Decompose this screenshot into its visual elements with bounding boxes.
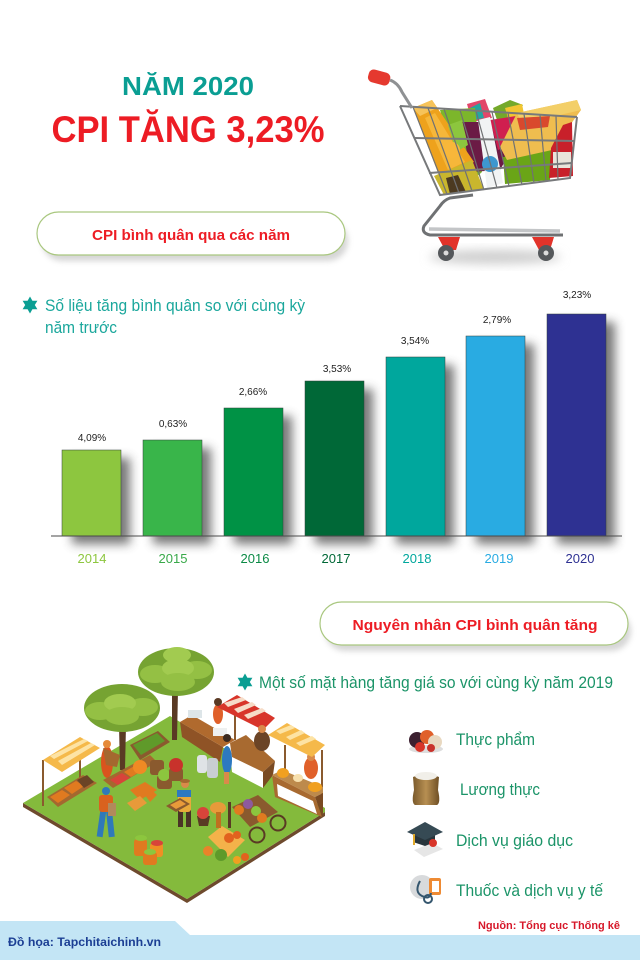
year labels: 2018 <box>403 551 431 566</box>
trees <box>84 647 214 770</box>
right stall <box>268 723 325 817</box>
heading: causes <box>320 602 631 651</box>
ground <box>23 803 325 903</box>
icon: graduation cap <box>407 822 443 857</box>
orange stand <box>203 802 249 864</box>
customer with bag <box>97 787 116 837</box>
year labels: 2019 <box>485 551 513 566</box>
item: medicine and health: Thuốc và dịch vụ y tế <box>456 881 603 900</box>
illustration: market <box>23 647 325 903</box>
chart note: năm trước <box>45 318 117 337</box>
title: CPI TĂNG 3,23% <box>52 109 324 150</box>
year labels <box>78 551 594 566</box>
year labels: 2014 <box>78 551 106 566</box>
icon: stethoscope <box>410 875 441 903</box>
baskets and sacks <box>134 807 210 865</box>
icon: food <box>409 730 443 753</box>
produce cart <box>228 795 286 842</box>
year labels: 2020 <box>566 551 594 566</box>
year labels: 2015 <box>159 551 187 566</box>
heading: causes: Nguyên nhân CPI bình quân tăng <box>352 617 598 634</box>
farmer <box>166 779 191 827</box>
list: price-rising items <box>407 730 603 903</box>
chart note <box>45 296 305 337</box>
value labels: 3,23% <box>563 290 591 301</box>
value labels: 3,53% <box>323 364 351 375</box>
footer band <box>0 921 640 960</box>
value labels: 2,66% <box>239 387 267 398</box>
value labels <box>78 290 591 444</box>
source: Nguồn: Tổng cục Thống kê <box>478 920 620 932</box>
vendor and crates <box>101 731 183 811</box>
value labels: 3,54% <box>401 336 429 347</box>
item: education: Dịch vụ giáo dục <box>456 831 573 850</box>
bars <box>62 314 606 536</box>
bar chart <box>51 290 622 566</box>
icon: star bullet <box>238 674 252 690</box>
graphic credit: Đồ họa: Tapchitaichinh.vn <box>8 937 161 949</box>
value labels: 0,63% <box>159 419 187 430</box>
value labels: 2,79% <box>483 315 511 326</box>
title <box>52 71 324 150</box>
back stall <box>180 695 275 762</box>
year labels: 2017 <box>322 551 350 566</box>
icon: star bullet <box>23 296 37 314</box>
left stall <box>43 737 100 807</box>
value labels: 4,09% <box>78 433 106 444</box>
icon: shopping cart <box>367 68 581 264</box>
heading: CPI by year: CPI bình quân qua các năm <box>92 227 290 244</box>
causes subheading: Một số mặt hàng tăng giá so với cùng kỳ năm 2019 <box>259 673 613 692</box>
title: NĂM 2020 <box>122 71 254 101</box>
bar shadows <box>72 322 615 544</box>
heading: CPI by year <box>37 212 348 261</box>
year labels: 2016 <box>241 551 269 566</box>
icon: rice sack <box>413 772 439 805</box>
item: food: Thực phẩm <box>456 730 535 749</box>
item: staple food: Lương thực <box>460 780 540 799</box>
chart note: Số liệu tăng bình quân so với cùng kỳ <box>45 296 305 315</box>
center stall <box>197 725 275 788</box>
